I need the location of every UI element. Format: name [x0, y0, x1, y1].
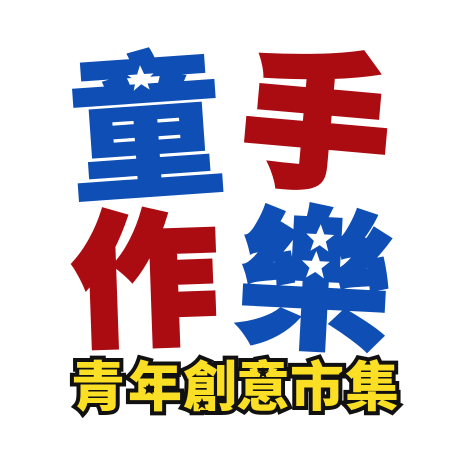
icon: two stars on le: [301, 223, 335, 279]
subtitle: yellow outlined text: 創: [183, 343, 237, 422]
character: le (blue): 樂: [234, 156, 397, 384]
subtitle: yellow outlined text: 意: [236, 343, 290, 422]
subtitle: yellow outlined text: 年: [128, 343, 182, 422]
subtitle: yellow outlined text: 集: [345, 343, 399, 422]
icon: small black stars in subtitle: [143, 367, 269, 410]
subtitle: yellow outlined text: 市: [290, 343, 344, 422]
subtitle: yellow outlined text: [71, 343, 399, 422]
character: tong (blue): 童: [60, 0, 231, 234]
subtitle: yellow outlined text: 青: [71, 343, 125, 422]
character: shou (red): 手: [236, 1, 399, 224]
character: zuo (red): 作: [69, 164, 220, 376]
icon: star on tong: [127, 64, 155, 91]
